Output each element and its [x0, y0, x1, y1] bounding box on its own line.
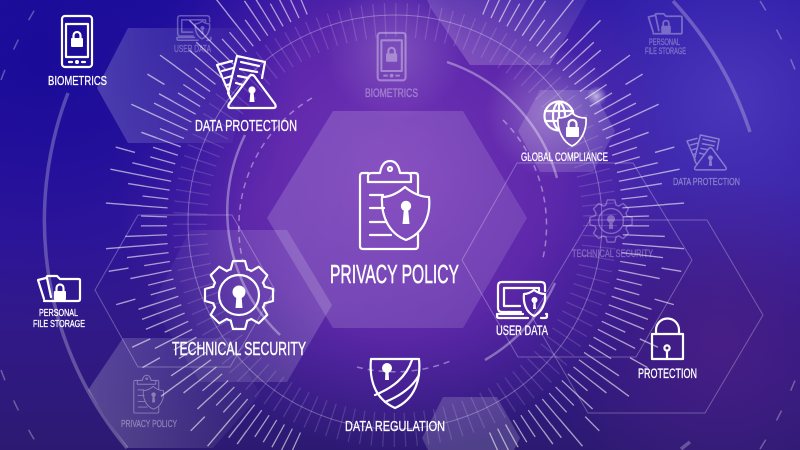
hexagon: technical security [152, 230, 332, 382]
faint item: biometrics: BIOMETRICS [365, 86, 418, 100]
item: data regulation: DATA REGULATION [345, 418, 445, 435]
item: technical security: TECHNICAL SECURITY [172, 339, 306, 359]
faint item: user data [174, 16, 211, 55]
item: protection: PROTECTION [638, 366, 697, 381]
hexagon: upper left [97, 28, 262, 143]
hexagon outlines [95, 163, 763, 413]
faint item: privacy policy: PRIVACY POLICY [121, 419, 177, 430]
faint item: privacy policy [121, 375, 177, 430]
thin circle [188, 15, 602, 429]
icon: globe and shield [544, 102, 586, 146]
hexagon: small privacy policy [88, 338, 260, 448]
faint item: data protection [673, 135, 740, 188]
faint item: personal file storage: FILE STORAGE [645, 46, 686, 56]
light spot [587, 86, 607, 106]
item: biometrics: BIOMETRICS [48, 73, 107, 88]
item: data protection: DATA PROTECTION [195, 118, 297, 135]
faint item: data protection: DATA PROTECTION [673, 176, 740, 188]
hexagon: top centre [427, 0, 587, 65]
faint item: personal file storage [645, 14, 686, 56]
glow behind global compliance [485, 47, 615, 177]
hexagon: global compliance [518, 90, 615, 172]
dashed arcs [239, 98, 547, 372]
faint item: personal file storage: PERSONAL [649, 37, 680, 47]
faint item: technical security [572, 200, 653, 260]
faint item: biometrics [365, 33, 418, 100]
hexagon: privacy policy main [267, 111, 527, 328]
icon: padlock [652, 318, 683, 359]
item: privacy policy centre: PRIVACY POLICY [330, 259, 459, 289]
item: technical security [172, 261, 306, 359]
item: protection [638, 318, 697, 381]
item: privacy policy centre [330, 161, 459, 289]
item: user data: USER DATA [496, 322, 548, 338]
item: global compliance [521, 102, 608, 164]
faint item: technical security: TECHNICAL SECURITY [572, 248, 653, 260]
thick inner arcs [227, 62, 557, 360]
faint item: user data: USER DATA [174, 44, 211, 55]
item: global compliance: GLOBAL COMPLIANCE [521, 150, 608, 164]
item: personal file storage [33, 276, 85, 330]
item: personal file storage: PERSONAL [39, 308, 78, 319]
item: biometrics [48, 16, 107, 88]
icon: striped shield [371, 359, 419, 408]
hexagon: bottom centre [422, 397, 520, 450]
item: user data [496, 282, 548, 338]
tick ring: inner faint [190, 20, 600, 430]
item: data protection [195, 56, 297, 135]
tick ring: outer [115, 2, 675, 448]
item: personal file storage: FILE STORAGE [33, 319, 85, 330]
item: data regulation [345, 359, 445, 435]
